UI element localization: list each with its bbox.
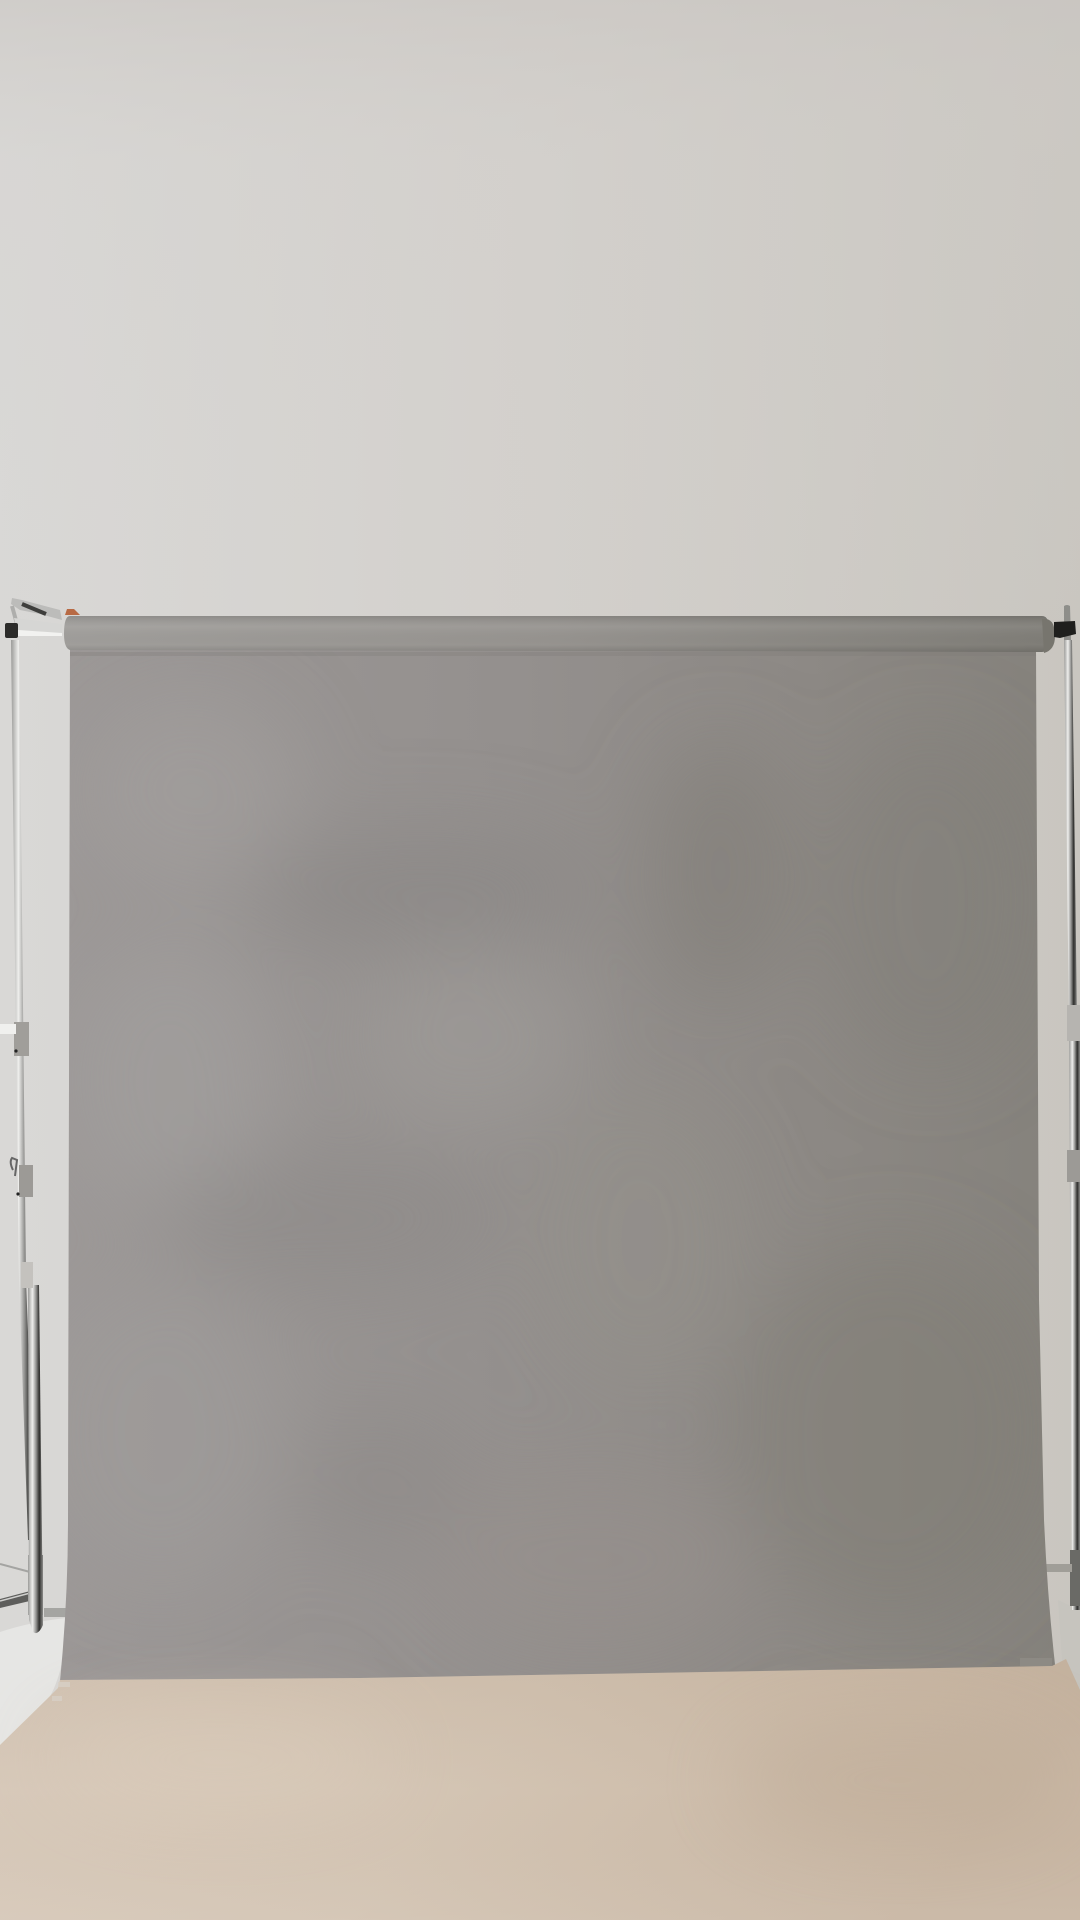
tape pieces [52, 1658, 1052, 1701]
right spigot [1054, 621, 1076, 638]
mottled paint patches [678, 802, 862, 1538]
left clamp [11, 598, 80, 636]
seamless floor paper [0, 1659, 1080, 1920]
backdrop paper [30, 650, 1060, 1700]
studio floor left [0, 1618, 66, 1752]
shade at top under roll [70, 652, 304, 656]
right stand horizontal stub [1046, 1564, 1072, 1572]
right light stand pole [1064, 605, 1080, 1610]
left stand horizontal stub [44, 1608, 68, 1617]
paper roll [64, 616, 1055, 653]
floor right [1058, 1600, 1080, 1690]
floor tonal patches [50, 1710, 1070, 1840]
left light stand pole [0, 640, 43, 1633]
left spigot [5, 623, 18, 638]
left stand brace [0, 1564, 34, 1608]
